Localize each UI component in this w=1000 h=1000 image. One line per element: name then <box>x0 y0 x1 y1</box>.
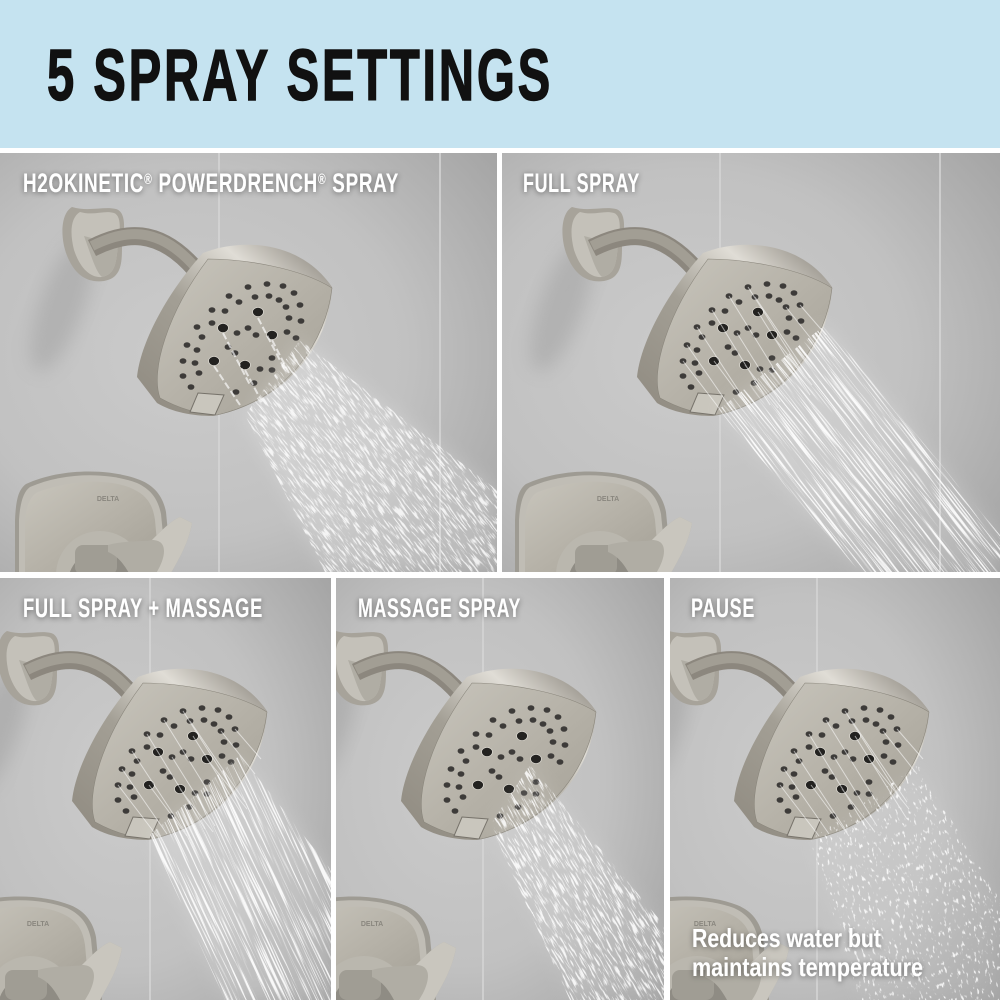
title: 5 SPRAY SETTINGS <box>47 36 553 116</box>
label: ® <box>144 171 153 188</box>
label: MASSAGE SPRAY <box>358 593 521 623</box>
callout text: maintains temperature <box>692 952 923 982</box>
spray: full <box>718 325 1000 572</box>
panel: full spray + massage <box>0 578 331 1000</box>
spray: H2Okinetic <box>214 318 497 572</box>
label: ® <box>318 171 326 188</box>
icon: valve trim <box>670 896 789 1000</box>
icon: water jets on head <box>683 287 826 412</box>
icon: shower head and arm <box>336 631 596 840</box>
icon: water jets on head <box>780 711 923 836</box>
label: H2OKINETIC <box>23 168 197 198</box>
icon: shower head and arm <box>0 631 267 840</box>
callout text: Reduces water but <box>692 923 881 953</box>
icon: shower head and arm <box>17 207 332 416</box>
label: FULL SPRAY + MASSAGE <box>23 593 263 623</box>
icon: valve trim <box>15 471 192 575</box>
icon: valve trim <box>0 896 122 1000</box>
panel: massage spray <box>336 578 664 1000</box>
icon: shower head and arm <box>517 207 832 416</box>
callout text <box>692 923 923 982</box>
icon: valve trim <box>515 471 692 575</box>
icon: water jets on head <box>118 711 261 836</box>
panel: full spray <box>502 153 1000 575</box>
icon: valve trim <box>336 896 456 1000</box>
label: FULL SPRAY <box>523 168 640 198</box>
spray: full + massage <box>150 755 331 1000</box>
label: SPRAY <box>326 168 399 198</box>
header band <box>0 0 1000 148</box>
panel: H2Okinetic PowerDrench spray <box>0 153 497 575</box>
spray: massage <box>490 765 664 1000</box>
label: POWERDRENCH <box>153 168 318 198</box>
panel: pause <box>670 578 1000 1000</box>
label: PAUSE <box>691 593 755 623</box>
spray: pause droplets <box>810 765 1000 1000</box>
icon: shower head and arm <box>670 631 930 840</box>
